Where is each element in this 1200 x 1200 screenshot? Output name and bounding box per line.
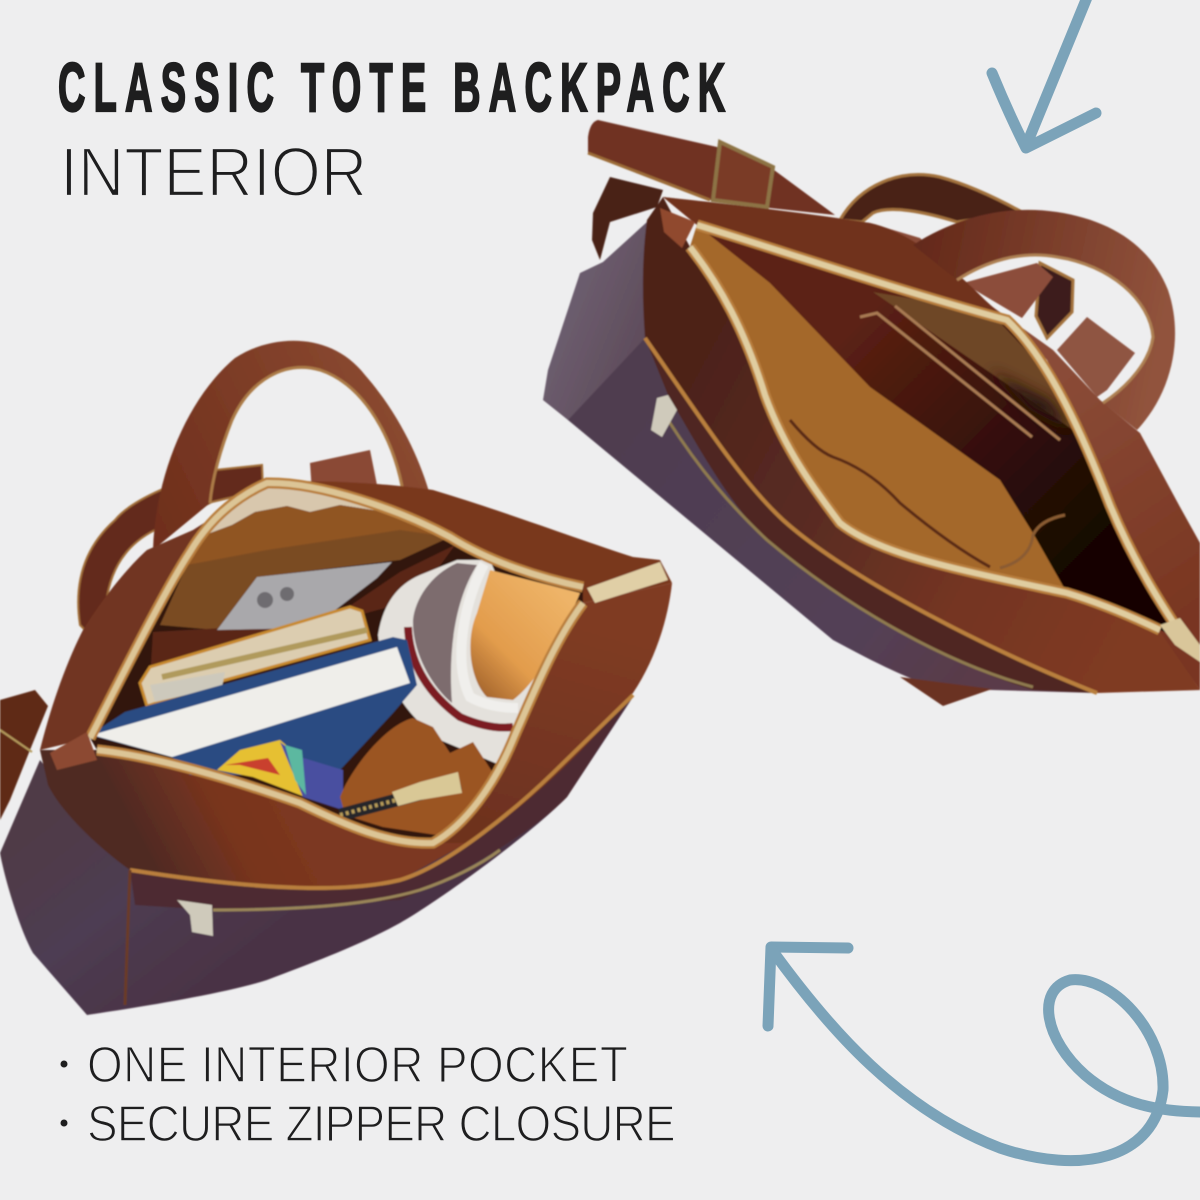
suede back panel: [873, 292, 1073, 430]
cream lining scallop: [205, 485, 385, 535]
photo: open empty backpack: [543, 120, 1200, 706]
corner tab: [660, 208, 695, 248]
canvas side panel: [543, 222, 740, 455]
canvas base: [0, 697, 633, 1015]
front handle: [913, 210, 1175, 430]
zipper pull, side pocket: [651, 395, 677, 437]
tan leather pouch: [340, 718, 493, 837]
outside pocket canvas: [568, 338, 1097, 693]
bullet: secure zipper closure: SECURE ZIPPER CLOSURE: [87, 1096, 676, 1153]
suede back wall: [187, 505, 450, 565]
phone: [217, 562, 392, 630]
leather left side: [40, 483, 267, 750]
leather front panel: [40, 750, 467, 888]
interior pocket edge: [790, 420, 990, 567]
bottom corner: [900, 677, 992, 706]
zipper pull, side pocket: [177, 900, 213, 936]
pocket zipper: [213, 850, 500, 910]
main zipper: [90, 483, 583, 843]
colorful scarf: [217, 740, 343, 810]
handle: [153, 341, 430, 550]
top and right leather body: [663, 197, 1200, 690]
interior cavity: [690, 225, 1185, 640]
back wall pocket edge: [860, 306, 1060, 440]
back handle and straps: [588, 120, 1135, 397]
lower pocket band: [130, 695, 633, 910]
bullet: one interior pocket: ONE INTERIOR POCKET: [87, 1037, 628, 1094]
interior cavity: [90, 483, 583, 843]
leather top back: [267, 481, 672, 603]
pocket zipper: [668, 420, 1033, 687]
leather front panel: [643, 197, 1200, 693]
water bottle: [378, 560, 580, 765]
suede lining: [690, 225, 1067, 593]
leather corner tab: [50, 732, 97, 770]
back straps: [0, 450, 378, 820]
zipper pull main: [587, 562, 668, 603]
tan edge binding: [645, 338, 1097, 693]
cream zip pouch: [140, 607, 370, 706]
arrow: top right pointing at bag: [992, 0, 1096, 148]
zipper pull, main: [1160, 618, 1200, 662]
blue book: [90, 637, 417, 775]
interior wavy seam: [1000, 515, 1065, 568]
title: CLASSIC TOTE BACKPACK: [58, 49, 725, 126]
photo: packed open backpack: [0, 341, 672, 1015]
bullet list: [60, 1037, 676, 1153]
main zipper: [690, 225, 1185, 640]
leather pocket: [150, 545, 455, 680]
subtitle: INTERIOR: [60, 134, 367, 212]
leather right side: [400, 583, 672, 873]
outside pocket seam: [130, 695, 633, 888]
suede pocket rim and panel: [160, 530, 450, 630]
pocket zipper band: [645, 338, 1097, 693]
arrow: bottom looping arrow pointing at bag: [768, 947, 1200, 1161]
